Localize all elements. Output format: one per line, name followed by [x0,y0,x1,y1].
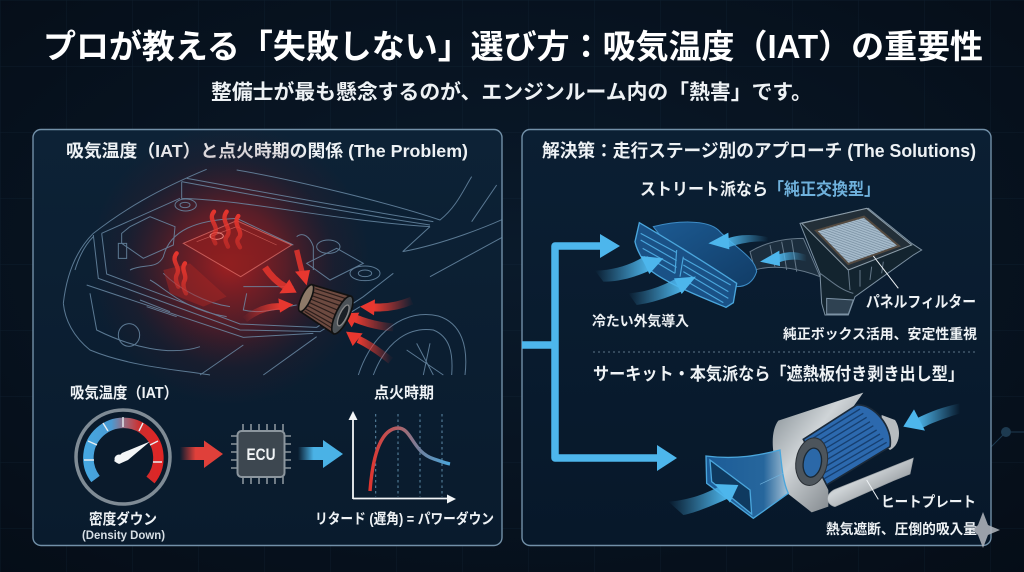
car outline [63,169,503,375]
label: panel filter: パネルフィルター [866,293,976,311]
panel: the problem [33,123,503,545]
heading: circuit type: サーキット・本気派なら「遮熱板付き剥き出し型」 [593,364,964,384]
label: ECU: ECU [246,446,276,464]
label: heat plate: ヒートプレート [881,494,976,511]
label: IAT gauge heading: 吸気温度（IAT） [70,383,178,402]
airflow arrows [668,403,960,515]
air box [750,208,922,315]
subtitle: 整備士が最も懸念するのが、エンジンルーム内の「熱害」です。 [211,80,812,104]
label: stock box stability: 純正ボックス活用、安定性重視 [783,326,977,342]
heat plate [773,393,913,512]
label: density down English: (Density Down) [82,528,165,542]
label: cold outside air: 冷たい外気導入 [592,313,689,329]
illustration: street air duct and airbox [595,208,922,315]
engine cover [183,221,292,277]
illustration: heat-shielded exposed filter [668,393,960,518]
car engine bay illustration [62,142,502,380]
label: heat shielding and intake volume: 熱気遮断、圧倒的吸入量 [826,521,977,537]
panel: the solutions [522,130,991,546]
icon: sparkle [973,512,1000,548]
heat arrows [245,250,412,361]
duct [635,222,757,307]
chart: ignition timing curve [348,411,456,504]
label: ignition timing: 点火時期 [374,383,434,402]
title: プロが教える「失敗しない」選び方：吸気温度（IAT）の重要性 [43,28,983,65]
funnel duct [706,450,788,518]
label: retard equals power down: リタード (遅角) = パワーダウン [315,510,494,528]
panel heading: solutions: 解決策：走行ステージ別のアプローチ (The Solutions) [542,141,976,161]
intake filter [298,284,354,335]
label: density down: 密度ダウン [89,510,157,528]
arrow: blue from ECU [298,440,343,468]
airflow arrows [595,233,807,305]
cone filter [792,405,899,488]
heading: street type: ストリート派なら「純正交換型」 [640,180,880,199]
arrow: red to ECU [180,440,223,468]
panel heading: problem: 吸気温度（IAT）と点火時期の関係 (The Problem) [66,141,468,161]
heat waves [175,212,240,293]
icon: ECU chip [231,424,291,484]
branching connector arrows [522,234,677,471]
icon: temperature gauge [76,410,170,504]
